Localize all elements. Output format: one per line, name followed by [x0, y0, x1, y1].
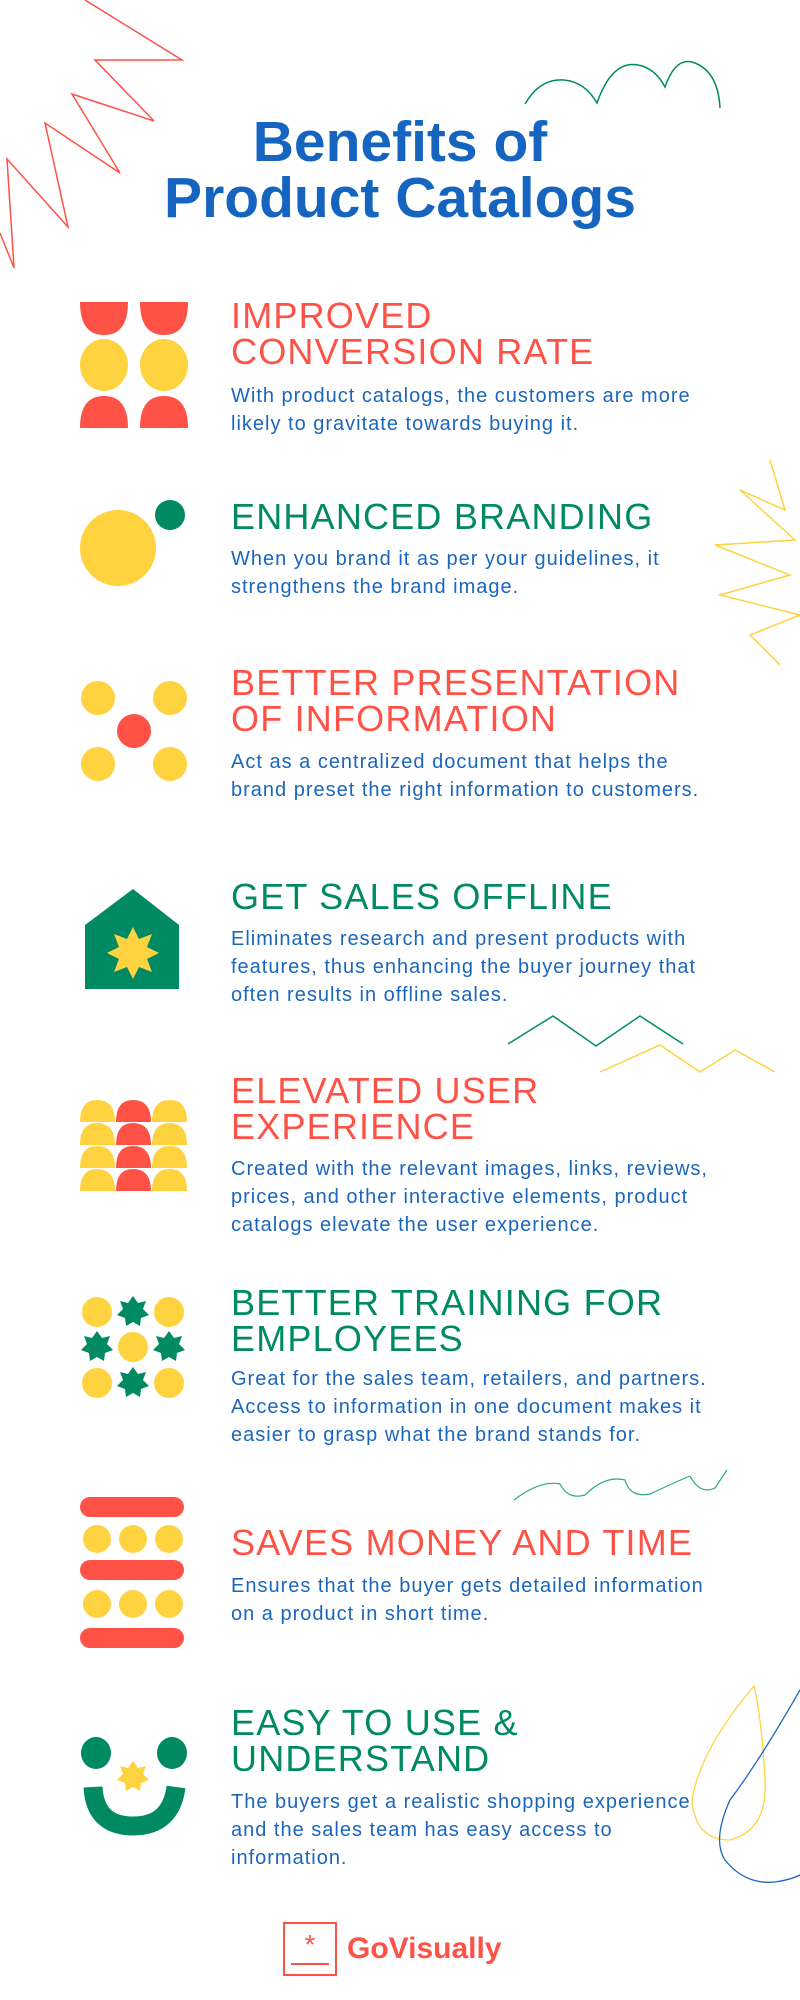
body 2	[231, 545, 660, 601]
heading 6: EMPLOYEES	[231, 1318, 464, 1359]
body 2: When you brand it as per your guidelines, it	[231, 548, 660, 570]
body 6: Great for the sales team, retailers, and partners.	[231, 1368, 707, 1390]
heading 5: ELEVATED USER	[231, 1070, 539, 1111]
title	[0, 114, 800, 226]
body 1: likely to gravitate towards buying it.	[231, 413, 579, 435]
body 6	[231, 1365, 707, 1449]
decoration: green squiggle top	[0, 0, 800, 140]
body 4	[231, 925, 696, 1009]
title: Benefits of	[253, 110, 547, 174]
heading 7: SAVES MONEY AND TIME	[231, 1522, 693, 1563]
icon: conversion rate	[0, 0, 200, 440]
decoration: red zigzag	[0, 0, 200, 280]
icon: training grid	[0, 0, 200, 1400]
body 1	[231, 382, 691, 438]
body 5: catalogs elevate the user experience.	[231, 1214, 599, 1236]
body 4: Eliminates research and present products with	[231, 928, 686, 950]
body 7: Ensures that the buyer gets detailed information	[231, 1575, 704, 1597]
body 8: The buyers get a realistic shopping experience	[231, 1791, 691, 1813]
title: Product Catalogs	[164, 166, 636, 230]
body 7: on a product in short time.	[231, 1603, 489, 1625]
body 6: easier to grasp what the brand stands for.	[231, 1424, 641, 1446]
heading 6: BETTER TRAINING FOR	[231, 1282, 663, 1323]
body 8: information.	[231, 1847, 348, 1869]
body 5: Created with the relevant images, links, reviews,	[231, 1158, 708, 1180]
logo text: GoVisually	[347, 1932, 502, 1965]
heading 8: EASY TO USE &	[231, 1702, 519, 1743]
heading 5: EXPERIENCE	[231, 1106, 475, 1147]
body 4: often results in offline sales.	[231, 984, 508, 1006]
heading 1: CONVERSION RATE	[231, 331, 594, 372]
body 3	[231, 748, 699, 804]
icon: money and time	[0, 0, 200, 1700]
heading 3	[231, 665, 681, 737]
logo icon	[283, 1922, 337, 1976]
body 2: strengthens the brand image.	[231, 576, 519, 598]
icon: smile	[0, 0, 200, 1900]
icon: user experience grid	[0, 0, 200, 1200]
heading 2: ENHANCED BRANDING	[231, 496, 653, 537]
body 5: prices, and other interactive elements, product	[231, 1186, 688, 1208]
decoration: mid zigzags	[0, 0, 800, 1100]
decoration: yellow zigzag right	[0, 0, 800, 700]
heading 1: IMPROVED	[231, 295, 433, 336]
heading 3: BETTER PRESENTATION	[231, 662, 681, 703]
logo icon: *	[305, 1929, 316, 1960]
logo	[283, 1922, 523, 1976]
body 8	[231, 1788, 691, 1872]
body 5	[231, 1155, 708, 1239]
heading 8	[231, 1705, 519, 1777]
icon: house	[0, 0, 200, 1000]
heading 4: GET SALES OFFLINE	[231, 876, 613, 917]
heading 6	[231, 1285, 663, 1357]
body 4: features, thus enhancing the buyer journey that	[231, 956, 696, 978]
body 3: brand preset the right information to customers.	[231, 779, 699, 801]
heading 5	[231, 1073, 539, 1145]
body 6: Access to information in one document makes it	[231, 1396, 702, 1418]
heading 3: OF INFORMATION	[231, 698, 557, 739]
body 7	[231, 1572, 704, 1628]
heading 1	[231, 298, 594, 370]
body 3: Act as a centralized document that helps the	[231, 751, 669, 773]
decoration: teal wave	[0, 0, 800, 1520]
icon: presentation	[0, 0, 200, 800]
body 1: With product catalogs, the customers are more	[231, 385, 691, 407]
body 8: and the sales team has easy access to	[231, 1819, 613, 1841]
heading 8: UNDERSTAND	[231, 1738, 490, 1779]
icon: branding	[0, 0, 200, 600]
